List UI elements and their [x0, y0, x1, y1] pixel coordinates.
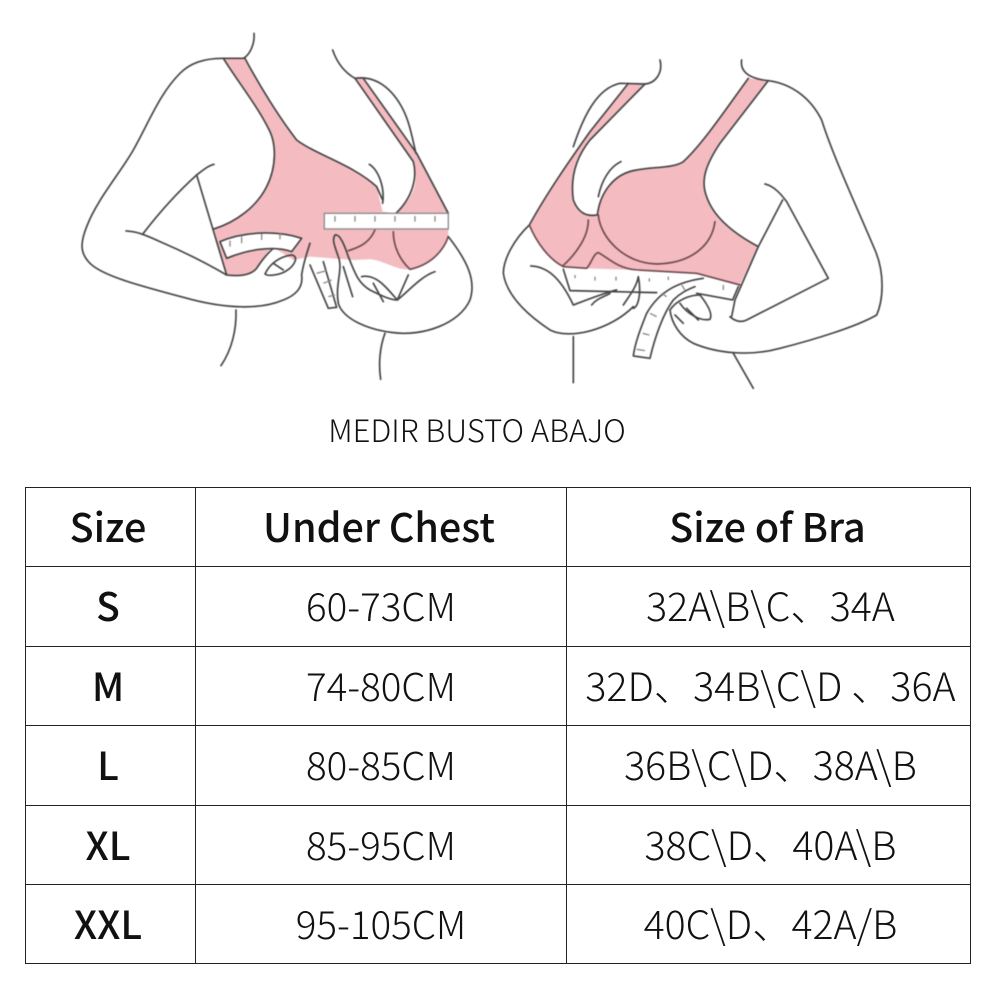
size table: [25, 487, 971, 964]
shoulders, neck and arm outlines: [573, 60, 661, 147]
bra edge lines: [214, 58, 274, 229]
right hand fingers: [670, 295, 711, 320]
header: size: Size: [70, 497, 146, 554]
row XL size: XL: [85, 816, 130, 872]
cup seams: [598, 215, 715, 264]
bra: pink fabric: [214, 58, 448, 275]
row M chest: 74-80CM: [306, 657, 456, 713]
measuring tape: horizontal ruler: [324, 213, 448, 229]
bra: pink fabric: [529, 78, 768, 285]
bra edge lines: [529, 83, 628, 225]
row XXL bra: 40C\D、42A/B: [644, 894, 897, 951]
row S chest: 60-73CM: [306, 577, 456, 633]
tape end hanging: [308, 260, 342, 308]
hand gripping the tape: [265, 255, 296, 275]
row L chest: 80-85CM: [306, 736, 456, 792]
row XXL size: XXL: [74, 895, 142, 951]
row L size: L: [97, 736, 119, 792]
figure: left side view: [82, 33, 472, 379]
caption: MEDIR BUSTO ABAJO: [328, 406, 626, 451]
row M bra: 32D、34B\C\D 、36A: [585, 656, 956, 713]
arm and shoulder outlines: [82, 33, 302, 307]
row XL chest: 85-95CM: [306, 816, 456, 872]
row L bra: 36B\C\D、38A\B: [624, 735, 917, 792]
measuring tape: band under bust: [563, 269, 738, 302]
row M size: M: [92, 657, 124, 713]
illustration: measuring under the bust, two figures: [80, 32, 884, 390]
measuring tape: long strip: [220, 233, 302, 258]
row S bra: 32A\B\C、34A: [646, 576, 895, 633]
header: under chest: Under Chest: [263, 497, 495, 554]
tape end hanging: [633, 277, 698, 357]
left hand: [531, 266, 617, 305]
row S size: S: [96, 577, 120, 633]
cup seams: [348, 230, 375, 251]
figure: right front view: [503, 60, 882, 388]
header: size of bra: Size of Bra: [669, 497, 866, 554]
right hand outline: [334, 235, 472, 333]
row XL bra: 38C\D、40A\B: [644, 815, 896, 872]
row XXL chest: 95-105CM: [296, 895, 466, 951]
